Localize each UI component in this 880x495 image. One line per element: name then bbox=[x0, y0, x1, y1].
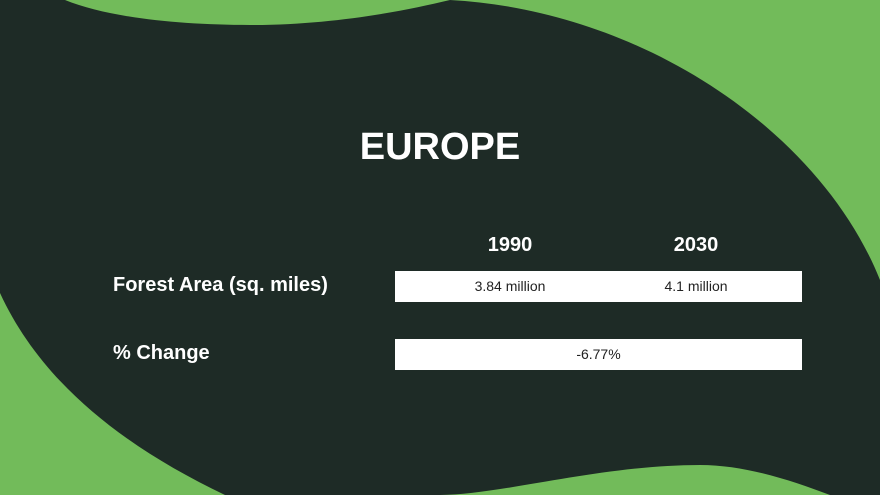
row: forest area values: 4.1 million bbox=[664, 278, 728, 294]
row: % change value bbox=[395, 339, 802, 370]
column header: 1990: 1990 bbox=[488, 234, 532, 256]
title: EUROPE bbox=[360, 126, 520, 168]
row: forest area values: 3.84 million bbox=[475, 278, 545, 294]
row label: % change: % Change bbox=[113, 342, 210, 364]
column header: 2030: 2030 bbox=[674, 234, 718, 256]
row: forest area values bbox=[395, 271, 802, 302]
row label: forest area: Forest Area (sq. miles) bbox=[113, 274, 328, 296]
row: % change value: -6.77% bbox=[576, 346, 621, 362]
